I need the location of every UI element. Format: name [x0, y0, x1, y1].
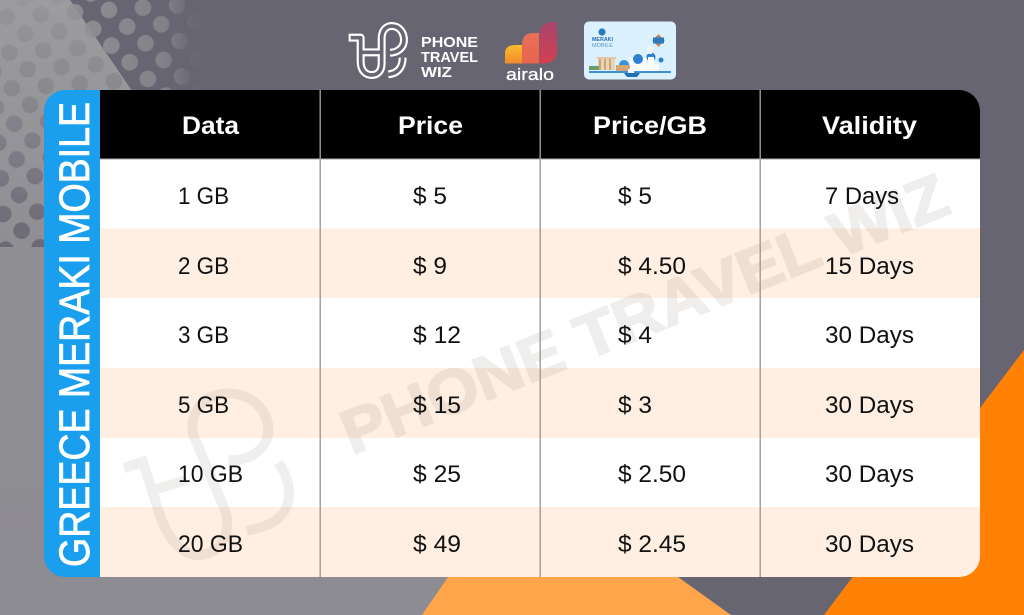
column: Data: 1 GB	[178, 183, 229, 210]
column: Data: 20 GB	[178, 531, 243, 558]
header row	[100, 90, 980, 159]
column: Data: 3 GB	[178, 322, 229, 349]
column: Price/GB: $ 3	[618, 392, 652, 419]
column: Price: $ 15	[413, 392, 461, 419]
text: Phone Travel Wiz wordmark	[421, 34, 478, 81]
side label band	[44, 90, 100, 577]
column: Price/GB: $ 4	[618, 322, 652, 349]
header labels: Validity	[822, 112, 917, 140]
column: Data	[178, 183, 243, 558]
column: Price	[413, 183, 461, 558]
watermark text: PHONE TRAVEL WIZ	[331, 161, 958, 468]
icon: Greek scenery	[589, 45, 671, 77]
header labels: Price/GB	[593, 112, 707, 140]
table body	[44, 90, 980, 577]
column: Price: $ 5	[413, 183, 447, 210]
text: Meraki Mobile	[592, 37, 614, 49]
header labels: Data	[182, 112, 240, 140]
column: Price: $ 9	[413, 253, 447, 280]
header labels: Price	[398, 112, 463, 140]
column: Validity: 30 Days	[825, 392, 914, 419]
text: airalo wordmark: airalo	[506, 65, 554, 84]
logo: Airalo	[505, 22, 557, 84]
icon: Airalo petals	[505, 22, 557, 64]
column: Validity: 30 Days	[825, 322, 914, 349]
column: Price/GB: $ 2.45	[618, 531, 686, 558]
column: Price/GB	[618, 183, 686, 558]
text: Meraki Mobile: MERAKI	[592, 37, 614, 43]
pricing table	[44, 90, 980, 577]
column: Price/GB: $ 5	[618, 183, 652, 210]
text: Meraki Mobile: MOBILE	[592, 43, 614, 49]
watermark logo	[124, 393, 289, 555]
icon: Meraki emblem	[598, 28, 606, 36]
column dividers	[100, 90, 980, 577]
column: Price: $ 25	[413, 461, 461, 488]
column: Data: 10 GB	[178, 461, 243, 488]
column: Validity: 7 Days	[825, 183, 899, 210]
column: Price: $ 12	[413, 322, 461, 349]
column: Price/GB: $ 4.50	[618, 253, 686, 280]
logo: Phone Travel Wiz	[349, 26, 478, 81]
side label: Greece Meraki Mobile: GREECE MERAKI MOBILE	[51, 102, 99, 567]
column: Data: 5 GB	[178, 392, 229, 419]
text: Phone Travel Wiz wordmark: PHONE	[421, 34, 478, 51]
header labels	[182, 112, 917, 140]
text: Phone Travel Wiz wordmark: TRAVEL	[421, 49, 478, 66]
column: Validity: 30 Days	[825, 531, 914, 558]
icon: Phone Travel Wiz monogram	[349, 26, 404, 75]
column: Data: 2 GB	[178, 253, 229, 280]
column: Price: $ 49	[413, 531, 461, 558]
icon: SIM chip	[652, 34, 665, 47]
text: Phone Travel Wiz wordmark: WIZ	[421, 64, 452, 81]
column: Validity: 15 Days	[825, 253, 914, 280]
column: Price/GB: $ 2.50	[618, 461, 686, 488]
column: Validity	[825, 183, 914, 558]
column: Validity: 30 Days	[825, 461, 914, 488]
logo: Meraki Mobile card	[584, 22, 676, 80]
